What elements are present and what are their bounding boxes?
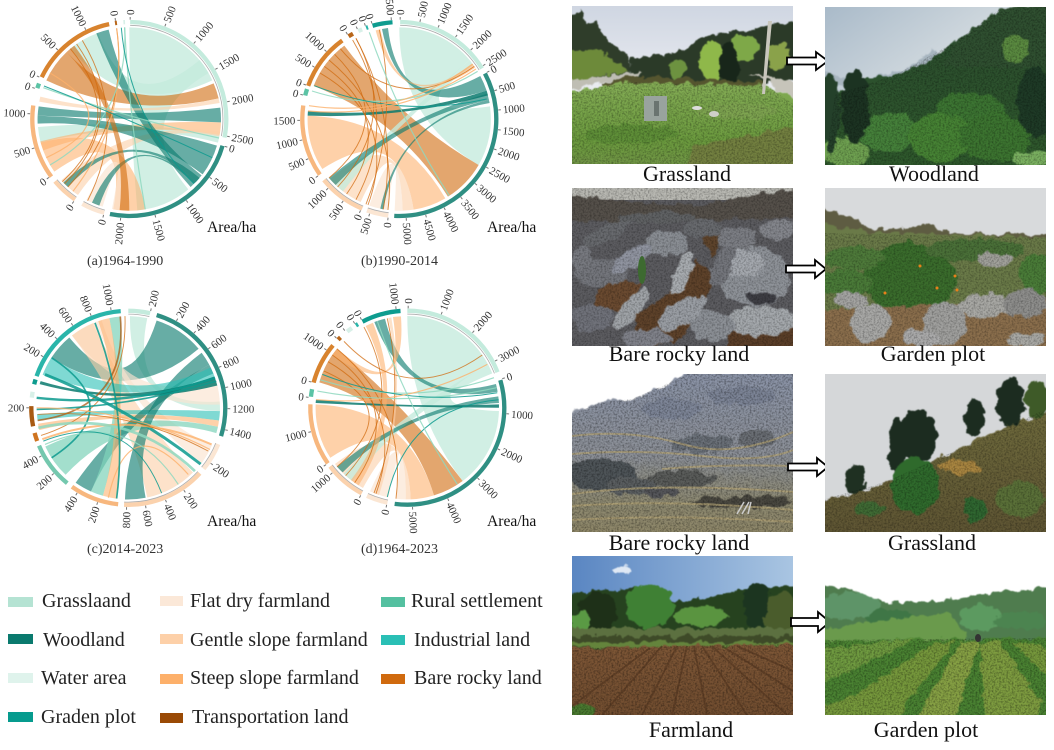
tick labels (a): 1500 bbox=[217, 51, 242, 73]
tick labels (c): 600 bbox=[140, 509, 154, 528]
tick labels (c): 200 bbox=[211, 462, 231, 481]
photo: bare rocky terraces bbox=[572, 374, 793, 532]
legend item: Water area: Water area bbox=[41, 667, 127, 689]
axis unit (b): Area/ha bbox=[487, 219, 536, 236]
legend item: Bare rocky land: Bare rocky land bbox=[414, 667, 542, 689]
photo: grassland hillside bbox=[825, 374, 1046, 532]
photo label: Garden plot: Garden plot bbox=[881, 341, 985, 366]
tick labels (a): 0 bbox=[125, 9, 137, 15]
tick labels (d): 0 bbox=[298, 391, 305, 404]
tick labels (d): 1000 bbox=[284, 428, 309, 445]
tick labels (b) bbox=[273, 0, 526, 246]
tick labels (c): 400 bbox=[193, 314, 213, 334]
tick labels (d): 0 bbox=[324, 327, 337, 340]
photo label: Farmland: Farmland bbox=[649, 717, 733, 742]
tick labels (a): 0 bbox=[64, 202, 77, 214]
caption (d): (d)1964-2023 bbox=[361, 542, 438, 557]
tick labels (c): 200 bbox=[181, 491, 200, 512]
tick labels (c): 1000 bbox=[100, 283, 115, 307]
tick labels (a): 0 bbox=[96, 218, 109, 227]
sector ring (b) bbox=[264, 0, 534, 254]
caption (b): (b)1990-2014 bbox=[361, 254, 438, 269]
tick labels (d): 0 bbox=[351, 308, 364, 319]
arrow 1 bbox=[787, 52, 828, 70]
photo: woodland bbox=[825, 7, 1046, 165]
tick labels (a): 1000 bbox=[183, 201, 206, 227]
ribbons (c) bbox=[37, 316, 220, 500]
tick labels (a): 0 bbox=[27, 68, 38, 81]
tick labels (c): 200 bbox=[86, 505, 103, 524]
tick labels (c): 800 bbox=[121, 511, 133, 528]
tick labels (a): 1000 bbox=[3, 107, 26, 120]
caption (a): (a)1964-1990 bbox=[87, 254, 163, 269]
tick labels (d): 0 bbox=[505, 371, 514, 384]
photo label: Bare rocky land: Bare rocky land bbox=[609, 530, 749, 555]
chord diagram (b) 1990-2014 bbox=[264, 0, 534, 254]
tick labels (b): 0 bbox=[336, 23, 350, 34]
tick labels (b): 500 bbox=[327, 201, 346, 222]
tick labels (d): 1000 bbox=[438, 287, 457, 312]
tick labels (b): 0 bbox=[352, 212, 365, 222]
tick labels (b): 1000 bbox=[275, 136, 300, 152]
tick labels (a): 1000 bbox=[68, 4, 89, 29]
sector ring (a) bbox=[0, 0, 265, 255]
legend item: Industrial land: Industrial land bbox=[414, 629, 530, 651]
tick labels (d): 4000 bbox=[443, 501, 463, 526]
tick labels (d): 0 bbox=[351, 497, 365, 508]
arrow 4 bbox=[791, 612, 830, 632]
tick labels (d): 1000 bbox=[301, 330, 326, 353]
tick labels (b): 1000 bbox=[502, 102, 526, 116]
tick labels (b): 0 bbox=[489, 63, 500, 76]
tick labels (d): 3000 bbox=[476, 478, 500, 502]
tick labels (b): 4000 bbox=[440, 209, 461, 235]
tick labels (d): 2000 bbox=[499, 446, 525, 466]
legend item: Transportation land: Transportation land bbox=[192, 706, 348, 728]
tick labels (d): 0 bbox=[343, 312, 357, 324]
tick labels (b): 1500 bbox=[454, 12, 477, 37]
tick labels (d): 3000 bbox=[497, 344, 522, 365]
tick labels (d): 0 bbox=[333, 319, 346, 332]
photo label: Garden plot: Garden plot bbox=[874, 717, 978, 742]
tick labels (d): 0 bbox=[379, 508, 392, 516]
ribbons (d) bbox=[316, 316, 499, 499]
tick labels (c): 600 bbox=[209, 332, 230, 352]
tick labels (c) bbox=[8, 283, 255, 528]
tick labels (a): 0 bbox=[38, 176, 50, 189]
ribbons (a) bbox=[38, 27, 221, 211]
axis unit (a): Area/ha bbox=[207, 219, 256, 236]
tick labels (b): 0 bbox=[363, 12, 376, 21]
chord diagram (c) 2014-2023 bbox=[0, 271, 265, 545]
tick labels (c): 200 bbox=[35, 472, 55, 493]
tick labels (b): 0 bbox=[382, 221, 394, 229]
tick labels (b): 500 bbox=[358, 216, 375, 236]
legend item: Garden plot: Graden plot bbox=[41, 706, 136, 728]
tick labels (b): 0 bbox=[395, 9, 407, 15]
tick labels (a): 2000 bbox=[231, 92, 255, 108]
tick labels (a): 500 bbox=[38, 32, 58, 52]
tick labels (b): 1000 bbox=[305, 187, 330, 212]
tick labels (b): 500 bbox=[416, 0, 431, 19]
tick labels (d): 1000 bbox=[309, 472, 334, 496]
tick labels (b): 500 bbox=[287, 156, 307, 174]
photo label: Bare rocky land: Bare rocky land bbox=[609, 341, 749, 366]
photo: garden plot tea field bbox=[825, 584, 1046, 715]
tick labels (b): 0 bbox=[307, 174, 318, 187]
tick labels (a) bbox=[3, 4, 255, 245]
tick labels (c): 400 bbox=[20, 453, 41, 472]
arrow 3 bbox=[788, 458, 828, 476]
legend item: Grassland: Grasslaand bbox=[42, 590, 131, 612]
tick labels (c): 400 bbox=[37, 320, 57, 341]
tick labels (b): 2000 bbox=[471, 27, 495, 52]
tick labels (a): 1500 bbox=[150, 218, 167, 243]
tick labels (c): 200 bbox=[147, 289, 162, 308]
tick labels (b): 2000 bbox=[496, 146, 521, 164]
tick labels (a): 500 bbox=[162, 4, 179, 24]
tick labels (d): 0 bbox=[403, 298, 415, 304]
photo label: Grassland: Grassland bbox=[888, 530, 976, 555]
tick labels (a): 500 bbox=[13, 144, 32, 161]
tick labels (d): 0 bbox=[315, 463, 326, 476]
tick labels (b): 1000 bbox=[435, 1, 455, 26]
tick labels (b): 0 bbox=[291, 88, 300, 101]
chord diagram (d) 1964-2023 bbox=[270, 271, 544, 545]
tick labels (b): 1500 bbox=[502, 125, 526, 139]
photo: grassland bbox=[572, 6, 793, 164]
tick labels (b): 3000 bbox=[474, 182, 499, 206]
axis unit (c): Area/ha bbox=[207, 513, 256, 530]
tick labels (a): 1000 bbox=[193, 19, 217, 44]
ribbons (b) bbox=[308, 27, 491, 211]
tick labels (a): 0 bbox=[23, 80, 32, 94]
photo: garden plot orchard bbox=[825, 188, 1046, 346]
tick labels (d) bbox=[284, 282, 534, 534]
legend item: Rural settlement: Rural settlement bbox=[411, 590, 543, 612]
chord diagram (a) 1964-1990 bbox=[0, 0, 265, 255]
tick labels (d): 0 bbox=[300, 374, 309, 388]
legend item: Woodland: Woodland bbox=[43, 629, 125, 651]
tick labels (a): 0 bbox=[227, 143, 236, 156]
tick labels (b): 1500 bbox=[273, 115, 296, 128]
tick labels (c): 600 bbox=[55, 305, 75, 326]
tick labels (c): 800 bbox=[221, 354, 242, 372]
tick labels (b): 2500 bbox=[487, 165, 512, 186]
tick labels (b): 500 bbox=[497, 80, 517, 96]
tick labels (c): 200 bbox=[8, 403, 25, 415]
photo: bare rocky land bbox=[572, 188, 793, 346]
photo label: Grassland: Grassland bbox=[643, 161, 731, 186]
sector ring (d) bbox=[270, 271, 544, 545]
tick labels (b): 0 bbox=[355, 14, 369, 24]
tick labels (c): 400 bbox=[161, 502, 178, 523]
tick labels (a): 2500 bbox=[231, 132, 255, 148]
tick labels (d): 5000 bbox=[406, 511, 419, 534]
tick labels (d): 1000 bbox=[386, 282, 401, 306]
legend bbox=[8, 590, 543, 728]
legend item: Steep slope farmland: Steep slope farmland bbox=[190, 667, 359, 689]
tick labels (b): 1000 bbox=[302, 30, 327, 54]
tick labels (b): 5000 bbox=[400, 222, 413, 246]
tick labels (c): 400 bbox=[62, 494, 81, 515]
axis unit (d): Area/ha bbox=[487, 513, 536, 530]
tick labels (c): 1200 bbox=[232, 404, 255, 416]
tick labels (c): 200 bbox=[22, 341, 42, 360]
caption (c): (c)2014-2023 bbox=[87, 542, 163, 557]
tick labels (c): 200 bbox=[174, 299, 193, 320]
photo: farmland bbox=[572, 556, 793, 715]
tick labels (d): 2000 bbox=[472, 309, 495, 334]
tick labels (b): 0 bbox=[294, 77, 304, 90]
legend item: Flat dry farmland: Flat dry farmland bbox=[190, 590, 330, 612]
tick labels (b): 4500 bbox=[420, 218, 438, 243]
legend item: Gentle slope farmland: Gentle slope farmland bbox=[190, 629, 368, 651]
tick labels (b): 500 bbox=[293, 52, 314, 71]
arrow 2 bbox=[786, 260, 826, 278]
tick labels (c): 800 bbox=[77, 294, 94, 314]
tick labels (b): 0 bbox=[347, 18, 360, 28]
tick labels (a): 500 bbox=[209, 176, 230, 196]
tick labels (d): 1000 bbox=[511, 409, 534, 422]
tick labels (a): 0 bbox=[107, 10, 120, 17]
tick labels (b): 3500 bbox=[458, 198, 482, 223]
photo label: Woodland: Woodland bbox=[889, 161, 979, 186]
tick labels (a): 2000 bbox=[113, 222, 127, 245]
tick labels (c): 1000 bbox=[229, 377, 253, 393]
tick labels (c): 1400 bbox=[228, 426, 253, 442]
sector ring (c) bbox=[0, 271, 265, 545]
tick labels (b): 2500 bbox=[484, 47, 510, 69]
